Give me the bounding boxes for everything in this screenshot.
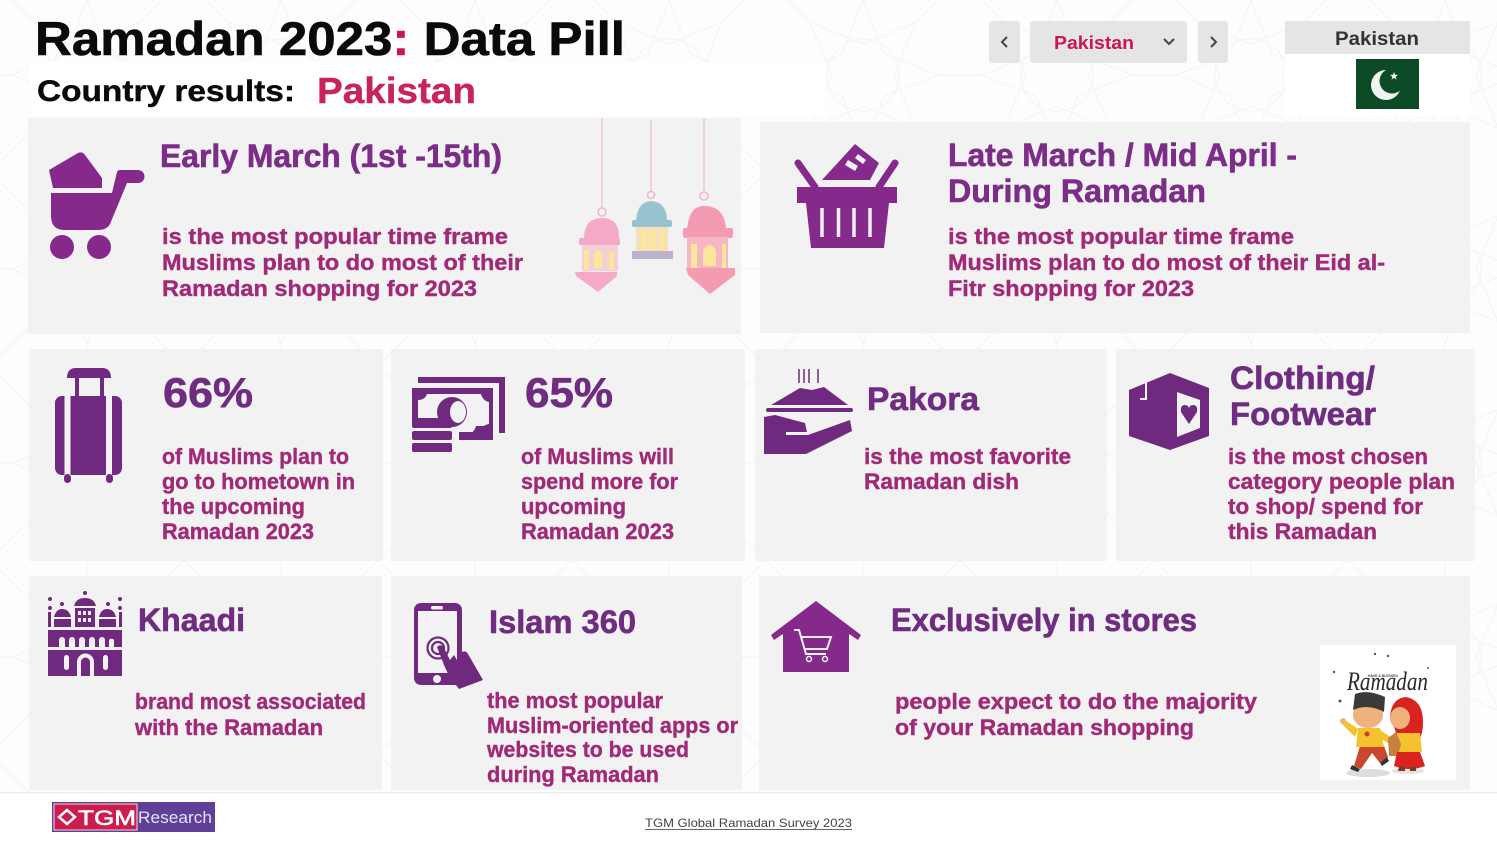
heading: Pakora xyxy=(867,381,979,417)
icon: mosque xyxy=(48,591,122,676)
description: go to hometown in xyxy=(162,469,355,494)
description xyxy=(864,444,1071,494)
footer source link: TGM Global Ramadan Survey 2023 xyxy=(645,816,852,830)
description: Muslims plan to do most of their Eid al- xyxy=(948,250,1385,275)
description: is the most chosen xyxy=(1228,444,1428,469)
icon: dish on hand xyxy=(764,369,853,454)
description: of Muslims will xyxy=(521,444,674,469)
panel: late March / mid April xyxy=(760,122,1470,333)
description xyxy=(948,224,1385,301)
heading xyxy=(1230,360,1376,432)
panel: brand Khaadi xyxy=(29,576,382,790)
description: this Ramadan xyxy=(1228,519,1377,544)
heading: Khaadi xyxy=(138,602,245,638)
panel: favorite dish xyxy=(755,349,1107,561)
description: is the most favorite xyxy=(864,444,1071,469)
panel: hometown 66% xyxy=(29,349,383,561)
icon: hanging lanterns xyxy=(575,118,735,294)
description xyxy=(162,224,523,301)
description: category people plan xyxy=(1228,469,1455,494)
subtitle: country results: Pakistan xyxy=(317,70,476,111)
subtitle: country results xyxy=(37,70,476,111)
icon: shopping basket xyxy=(797,144,897,248)
heading: Exclusively in stores xyxy=(891,602,1197,638)
description: the upcoming xyxy=(162,494,305,519)
heading: Clothing/ xyxy=(1230,360,1375,396)
description: Ramadan shopping for 2023 xyxy=(162,276,477,301)
description: Ramadan 2023 xyxy=(162,519,314,544)
panel: early March xyxy=(28,118,741,334)
description: websites to be used xyxy=(486,737,689,762)
country label and flag xyxy=(1285,21,1470,116)
subtitle: country results: Country results: xyxy=(37,75,295,108)
panel: app Islam 360 xyxy=(391,576,742,790)
description: is the most popular time frame xyxy=(948,224,1294,249)
illustration: Ramadan children: Ramadan xyxy=(1346,667,1428,696)
description xyxy=(134,689,366,740)
heading: Footwear xyxy=(1230,396,1376,432)
description: during Ramadan xyxy=(487,762,659,787)
icon: house with cart xyxy=(771,601,861,672)
description: upcoming xyxy=(521,494,626,519)
description: Muslim-oriented apps or xyxy=(487,713,738,738)
description: of Muslims plan to xyxy=(162,444,349,469)
illustration: Ramadan children xyxy=(1320,645,1456,780)
description: to shop/ spend for xyxy=(1228,494,1423,519)
description: brand most associated xyxy=(135,689,366,714)
title: Ramadan 2023 : Data Pill xyxy=(35,12,625,65)
icon: box with heart xyxy=(1129,373,1209,450)
heading: Late March / Mid April - xyxy=(948,137,1297,173)
illustration: Ramadan children: HAVE A BLESSED xyxy=(1368,673,1398,678)
description: Ramadan dish xyxy=(864,469,1019,494)
dropdown xyxy=(1030,21,1187,63)
country selector xyxy=(989,21,1228,63)
icon: phone with pointing hand xyxy=(414,603,483,689)
description xyxy=(895,689,1258,740)
heading xyxy=(948,137,1297,209)
statistic: 66% xyxy=(163,369,253,416)
description: Fitr shopping for 2023 xyxy=(948,276,1194,301)
description: is the most popular time frame xyxy=(162,224,508,249)
heading: Early March (1st -15th) xyxy=(160,138,502,174)
logo: TGM Research: Research xyxy=(138,809,212,827)
description: of your Ramadan shopping xyxy=(895,715,1194,740)
country label and flag: Pakistan xyxy=(1335,29,1419,50)
next button xyxy=(1198,21,1228,63)
logo: TGM Research xyxy=(52,802,215,832)
description: Ramadan 2023 xyxy=(521,519,674,544)
statistic: 65% xyxy=(525,369,613,416)
panel: clothing / footwear xyxy=(1116,349,1475,561)
description xyxy=(162,444,355,544)
panel: spend more 65% xyxy=(391,349,745,561)
previous button xyxy=(989,21,1020,63)
logo: TGM Research: TGM xyxy=(78,807,136,830)
dropdown: Pakistan xyxy=(1054,33,1134,53)
panel: exclusively in stores xyxy=(759,576,1470,790)
description xyxy=(521,444,678,544)
icon: suitcase xyxy=(55,368,122,483)
icon: shopping cart xyxy=(49,152,144,259)
icon: Pakistan flag xyxy=(1356,59,1419,109)
heading: During Ramadan xyxy=(948,173,1206,209)
description xyxy=(486,688,738,787)
description: with the Ramadan xyxy=(134,715,323,740)
description: Muslims plan to do most of their xyxy=(162,250,523,275)
description: spend more for xyxy=(521,469,678,494)
description xyxy=(1228,444,1455,544)
description: the most popular xyxy=(487,688,663,713)
description: people expect to do the majority xyxy=(895,689,1258,714)
icon: banknotes and coins xyxy=(412,377,505,452)
heading: Islam 360 xyxy=(489,604,636,640)
